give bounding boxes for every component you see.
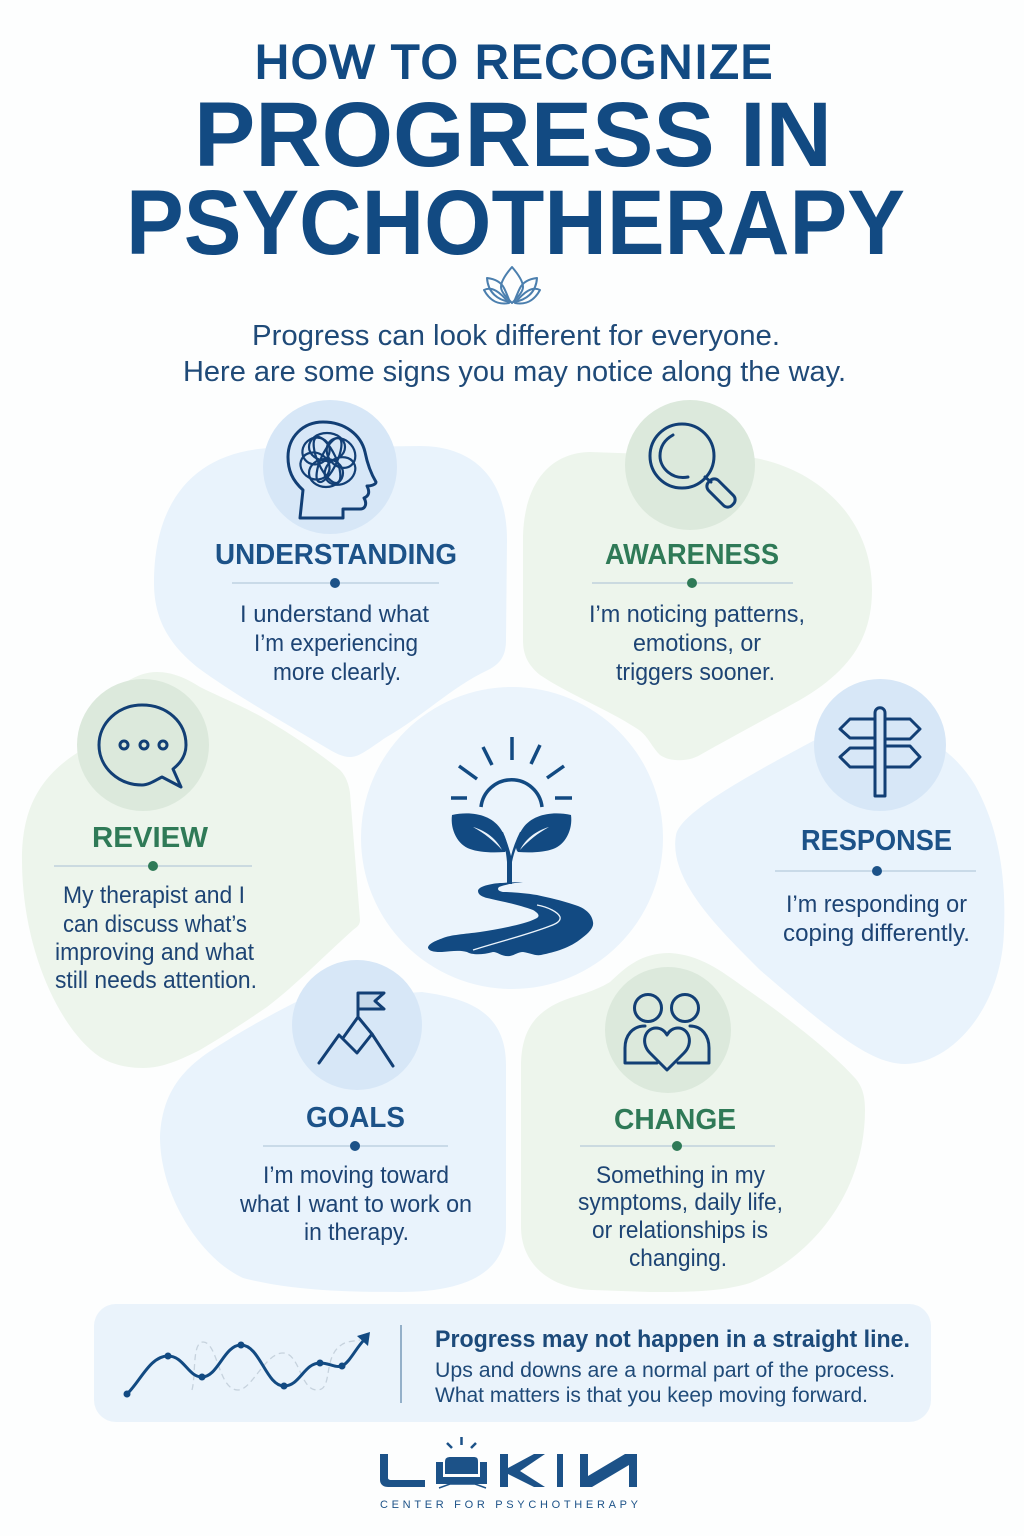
icon: winding path [428,882,593,956]
subtitle [183,320,846,388]
subtitle: Here are some signs you may notice along the way. [183,356,846,388]
icon: two people with heart [605,967,731,1093]
callout text [435,1326,910,1407]
title: PROGRESS IN [194,84,832,186]
text: change: changing. [629,1245,727,1272]
heading: change: CHANGE [614,1104,736,1136]
icon: leaves and stem [452,813,571,884]
text: awareness: I’m noticing patterns, [589,601,805,628]
callout text: Progress may not happen in a straight line. [435,1326,910,1353]
text: awareness [589,601,805,686]
text: goals [239,1162,472,1246]
text: review: still needs attention. [55,967,257,994]
text: review: can discuss what’s [63,911,247,938]
center circle: plant and path illustration [361,687,663,989]
text: change: symptoms, daily life, [578,1189,783,1216]
heading: awareness: AWARENESS [605,539,779,571]
heading: review: REVIEW [92,822,209,854]
title: PSYCHOTHERAPY [126,172,905,274]
heading: goals: GOALS [306,1102,405,1134]
panel: goals [160,960,506,1292]
text: change: or relationships is [592,1217,768,1244]
text: goals: in therapy. [304,1219,409,1246]
logo: couch with rays [436,1437,487,1488]
text: goals: I’m moving toward [263,1162,449,1189]
text: response: coping differently. [783,920,970,947]
panel: response [675,679,1004,1064]
title: HOW TO RECOGNIZE [255,35,772,88]
text: change [578,1162,783,1272]
text: change: Something in my [596,1162,765,1189]
panel: review [22,672,360,1068]
panel: awareness [523,400,872,760]
callout: not a straight line [94,1304,931,1422]
text: response: I’m responding or [786,891,967,918]
text: response [783,891,970,947]
heading: understanding: UNDERSTANDING [215,539,457,571]
icon: magnifying glass [625,400,755,530]
callout text: What matters is that you keep moving forward. [435,1384,868,1407]
text: awareness: emotions, or [633,630,761,657]
icon: mountain with flag [292,960,422,1090]
text: review [55,882,257,994]
icon: sun [451,737,572,807]
text: awareness: triggers sooner. [616,659,775,686]
text: understanding: I’m experiencing [254,630,418,657]
text: goals: what I want to work on [239,1191,472,1218]
title [126,35,905,274]
panel: change [521,953,865,1292]
subtitle: Progress can look different for everyone. [252,320,780,352]
text: understanding: more clearly. [273,659,401,686]
callout text: Ups and downs are a normal part of the process. [435,1359,895,1382]
heading: response: RESPONSE [801,825,952,857]
icon: lotus [484,267,540,303]
logo: K I N letters [500,1454,637,1487]
text: review: My therapist and I [63,882,245,909]
icon: speech bubble [77,679,209,811]
text: understanding [240,601,429,686]
logo: tagline: CENTER FOR PSYCHOTHERAPY [380,1499,639,1511]
text: understanding: I understand what [240,601,429,628]
panel: understanding [154,400,507,757]
text: review: improving and what [55,939,254,966]
icon: head with tangled thoughts [263,400,397,534]
logo: L [380,1454,425,1487]
chart: wavy progress line [124,1332,370,1398]
icon: signpost [814,679,946,811]
logo [380,1437,639,1511]
